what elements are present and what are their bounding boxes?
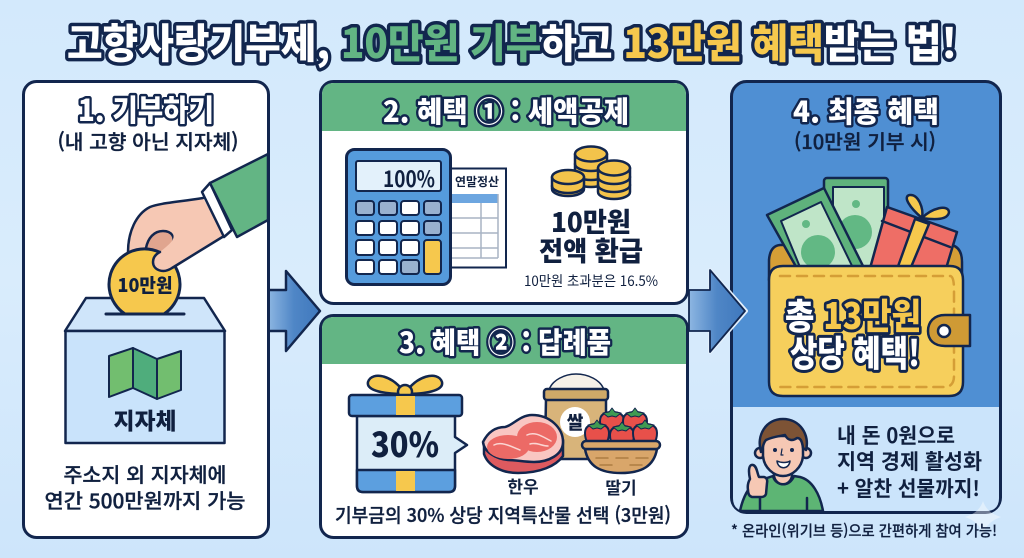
subheading: step 1: (내 고향 아닌 지자체) — [58, 126, 239, 155]
panel: step 3 gift — [320, 316, 688, 538]
labels: beef and strawberry: 딸기 — [605, 474, 637, 499]
text: closing message: 내 돈 0원으로 — [837, 420, 955, 450]
text: full refund — [539, 201, 643, 269]
illustration: smiling person with thumbs up — [740, 419, 823, 511]
icon: wallet with money and gift — [767, 178, 970, 396]
text: closing message: + 알찬 선물까지! — [837, 473, 980, 503]
icon: coin stacks — [552, 146, 630, 199]
panel: step 4 final benefit — [732, 82, 1000, 512]
icon: rice bag: 쌀 — [567, 409, 584, 435]
wallet text: total benefit — [785, 288, 921, 377]
icon: coin and slot: 10만원 — [118, 271, 172, 298]
arrow: step 1 to benefits — [268, 271, 320, 351]
icon: year-end settlement document — [445, 168, 506, 268]
subheading: step 4: (10만원 기부 시) — [794, 126, 936, 155]
arrow: benefits to final — [689, 270, 746, 352]
icon: calculator — [346, 150, 450, 284]
heading: step 4: 4. 최종 혜택 — [793, 89, 939, 131]
icon: hanwoo beef — [483, 415, 563, 473]
icon: gift box 30% — [349, 376, 467, 492]
text: annual limit: 주소지 외 지자체에 — [64, 459, 226, 488]
text: full refund: 10만원 — [551, 201, 631, 240]
text: annual limit — [44, 459, 246, 514]
heading: step 1: 1. 기부하기 — [78, 86, 214, 130]
heading: step 3: 3. 혜택 ② : 답례품 — [399, 320, 611, 362]
footnote: * 온라인(위기브 등)으로 간편하게 참여 가능! — [731, 520, 997, 541]
icon: hand back — [128, 198, 224, 270]
text: over-limit rate: 10만원 초과분은 16.5% — [524, 271, 658, 291]
icon: strawberry basket — [582, 408, 660, 473]
text: annual limit: 연간 500만원까지 가능 — [44, 485, 246, 514]
text: closing message — [837, 420, 982, 503]
text: 30%: 30% — [371, 418, 439, 467]
panel: step 2 tax credit — [320, 82, 688, 304]
icon: rice bag — [544, 374, 608, 459]
labels: beef and strawberry — [507, 473, 637, 499]
text: gift description: 기부금의 30% 상당 지역특산물 선택 (3만원) — [335, 501, 671, 528]
heading: step 2: 2. 혜택 ① : 세액공제 — [383, 89, 629, 131]
text: full refund: 전액 환급 — [539, 230, 643, 269]
icon: calculator: 100% — [383, 162, 435, 194]
watermark star — [965, 501, 1001, 534]
wallet text: total benefit: 상당 혜택! — [790, 325, 920, 377]
title: 고향사랑기부제, 10만원 기부하고 13만원 혜택받는 법! — [67, 10, 957, 70]
label: local government: 지자체 — [114, 402, 176, 436]
panel: step 1 donate — [24, 82, 268, 538]
icon: coin and slot — [106, 249, 184, 314]
icon: year-end settlement document: 연말정산 — [455, 173, 499, 190]
icon: donation box — [65, 298, 225, 443]
text: closing message: 지역 경제 활성화 — [837, 446, 982, 476]
icon: hand front and sleeve — [153, 154, 268, 271]
wallet text: total benefit: 총 13만원 — [785, 288, 921, 340]
labels: beef and strawberry: 한우 — [507, 473, 539, 498]
